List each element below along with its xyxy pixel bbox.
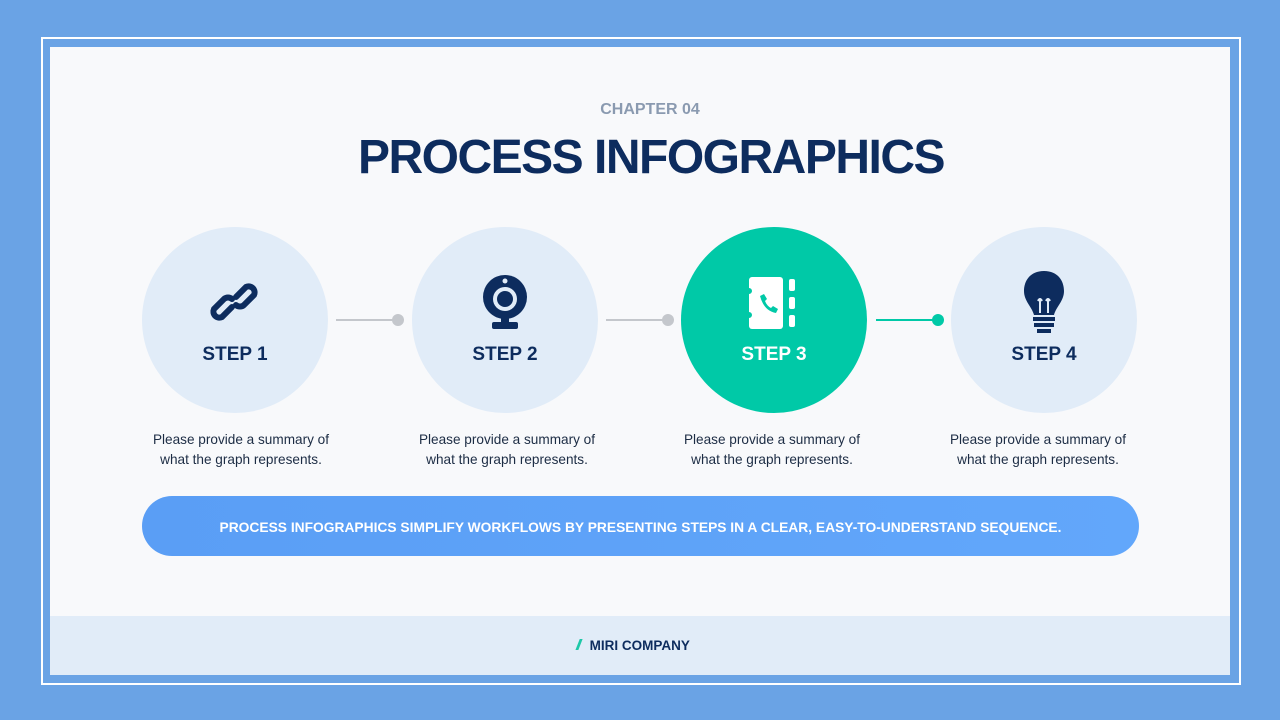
step 2: STEP 2	[472, 344, 538, 365]
step 3 description: Please provide a summary of	[684, 432, 860, 447]
icon: light bulb	[1024, 271, 1064, 333]
step 2 description: what the graph represents.	[426, 452, 588, 467]
connector 1	[336, 314, 404, 326]
step 1 description: what the graph represents.	[160, 452, 322, 467]
step 4	[951, 227, 1137, 413]
step 4 description: what the graph represents.	[957, 452, 1119, 467]
step 3	[681, 227, 867, 413]
icon: webcam	[483, 275, 527, 329]
step 1: STEP 1	[202, 344, 268, 365]
step 4 description	[950, 432, 1126, 467]
step 2	[412, 227, 598, 413]
step 1 description: Please provide a summary of	[153, 432, 329, 447]
footer band	[50, 616, 1230, 675]
step 1	[142, 227, 328, 413]
summary banner: PROCESS INFOGRAPHICS SIMPLIFY WORKFLOWS BY PRESENTING STEPS IN A CLEAR, EASY-TO-UNDERSTAND SEQUENCE.	[220, 520, 1061, 535]
connector 3	[876, 314, 944, 326]
step 4 description: Please provide a summary of	[950, 432, 1126, 447]
step 3 description	[684, 432, 860, 467]
step 1 description	[153, 432, 330, 467]
step 3: STEP 3	[741, 344, 807, 365]
chapter label: CHAPTER 04	[600, 101, 700, 118]
step 2 description: Please provide a summary of	[419, 432, 595, 447]
footer logo: // MIRI COMPANY	[576, 637, 690, 654]
step 2 description	[419, 432, 596, 467]
title: PROCESS INFOGRAPHICS	[358, 131, 944, 184]
icon: link	[210, 283, 258, 321]
step 4: STEP 4	[1011, 344, 1077, 365]
summary banner	[142, 496, 1139, 556]
connector 2	[606, 314, 674, 326]
icon: phone book	[749, 277, 795, 329]
step 3 description: what the graph represents.	[691, 452, 853, 467]
